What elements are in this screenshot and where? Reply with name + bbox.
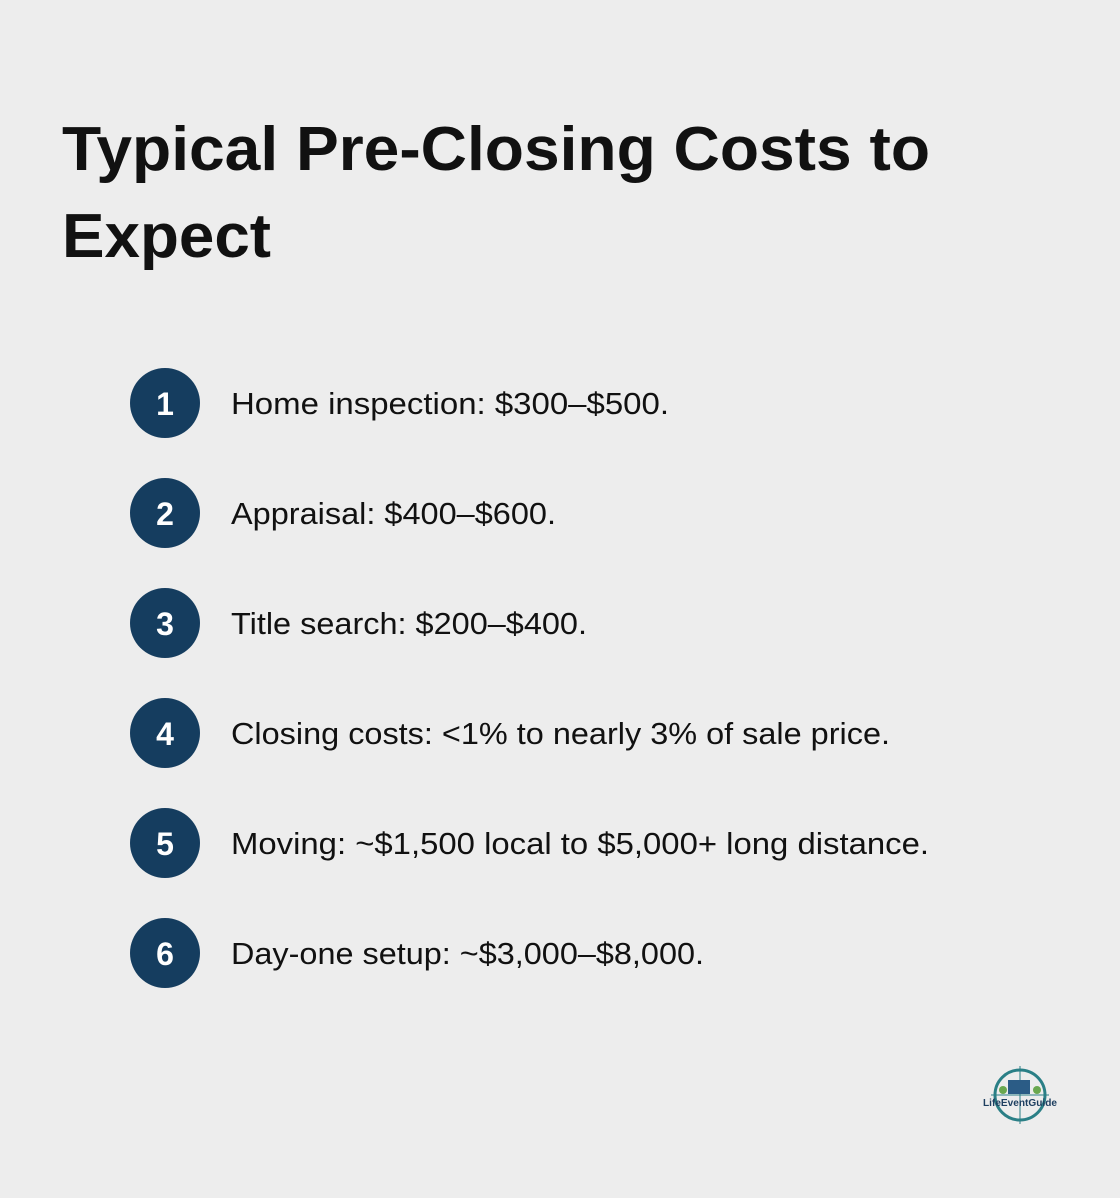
item 2: 2 [156, 496, 174, 532]
item 5: Moving: ~$1,500 local to $5,000+ long distance. [231, 826, 929, 861]
item 5: 5 [156, 826, 174, 862]
logo [983, 1066, 1057, 1124]
item 1 [130, 368, 669, 438]
item 2: Appraisal: $400–$600. [231, 496, 556, 531]
item 4: 4 [156, 716, 174, 752]
title [62, 115, 930, 271]
logo: LifeEventGuide [983, 1098, 1057, 1109]
item 6: Day-one setup: ~$3,000–$8,000. [231, 936, 704, 971]
item 3: 3 [156, 606, 174, 642]
item 6 [130, 918, 704, 988]
item 5 [130, 808, 929, 878]
item 1: 1 [156, 386, 174, 422]
title: Typical Pre-Closing Costs to [62, 115, 930, 184]
item 4: Closing costs: <1% to nearly 3% of sale price. [231, 716, 890, 751]
item 6: 6 [156, 936, 174, 972]
item 3 [130, 588, 587, 658]
item 1: Home inspection: $300–$500. [231, 386, 669, 421]
title: Expect [62, 202, 271, 271]
item 2 [130, 478, 556, 548]
item 3: Title search: $200–$400. [231, 606, 587, 641]
item 4 [130, 698, 890, 768]
